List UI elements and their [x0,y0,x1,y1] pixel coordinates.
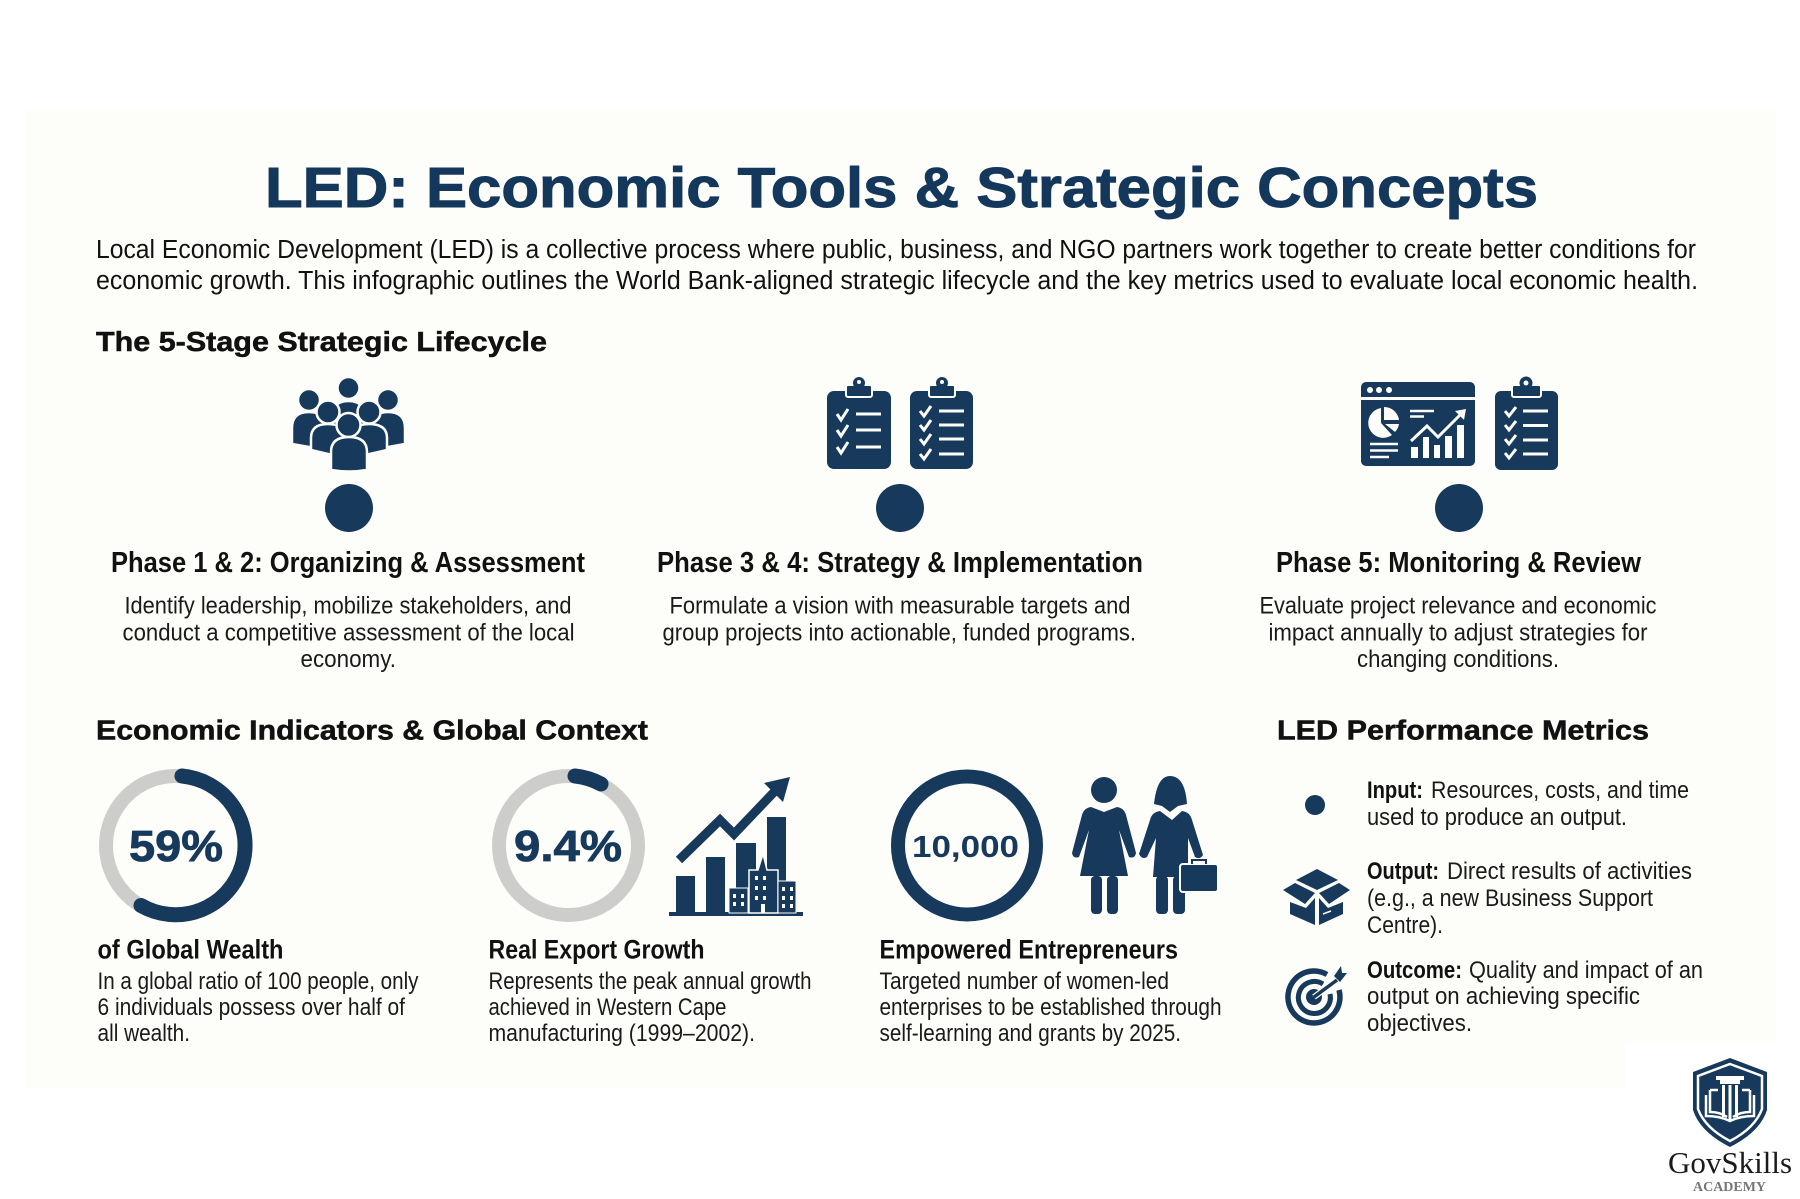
text: export growth: achieved in Western Cape [488,994,726,1021]
metric: output [1367,858,1692,939]
panel: export growth stat [488,776,812,1047]
phase 5 text [1260,592,1656,673]
ring: 59 percent: 59% [129,822,223,871]
heading: performance metrics: LED Performance Metrics [1277,714,1649,746]
text: export growth [488,968,812,1047]
phase 3 and 4 heading: Phase 3 & 4: Strategy & Implementation [657,547,1143,579]
phase 5 text: impact annually to adjust strategies for [1268,620,1648,646]
intro text: Local Economic Development (LED) is a collective process where public, business, and NGO partners work together to create better conditions for [96,236,1696,264]
metric: outcome: objectives. [1367,1010,1472,1037]
phase 3 and 4 text: Formulate a vision with measurable targets and [670,592,1130,620]
phase 1 and 2 text [122,592,574,673]
label: of global wealth: of Global Wealth [98,934,284,964]
text: export growth: Represents the peak annual growth [488,968,812,995]
metric: input: Input: [1367,777,1423,804]
metric: output: Output: [1367,858,1439,885]
heading: lifecycle: The 5-Stage Strategic Lifecycle [96,326,547,357]
text: export growth: manufacturing (1999–2002). [488,1020,755,1047]
metric: input: used to produce an output. [1367,804,1627,831]
wordmark: GovSkills [1668,1145,1792,1180]
text: entrepreneurs: Targeted number of women-led [880,968,1169,995]
panel: phase 1 and 2 [111,377,585,673]
phase 1 and 2 text: Identify leadership, mobilize stakeholders, and [124,592,572,620]
icon: growth chart with city [669,777,803,916]
icon: two businesswomen [1072,776,1218,914]
phase 1 and 2 text: economy. [300,646,396,673]
metric: input: Resources, costs, and time [1431,777,1689,804]
icon: open box [1283,869,1350,925]
metric: outcome [1367,957,1703,1037]
icon: group of people [292,377,405,472]
phase 3 and 4 text: group projects into actionable, funded programs. [662,620,1136,646]
icon: shield with column and book [1693,1058,1767,1147]
icon: clipboard [1495,376,1558,470]
metric: output: (e.g., a new Business Support [1367,885,1653,912]
icon: two clipboards [827,377,973,469]
logo: GovSkills Academy [1668,1058,1792,1195]
panel: phase 3 and 4 [657,377,1143,646]
text: entrepreneurs: enterprises to be established through [880,994,1222,1021]
text: global wealth: 6 individuals possess over half of [98,994,405,1021]
label: empowered entrepreneurs: Empowered Entrepreneurs [880,934,1178,964]
phase 5 text: Evaluate project relevance and economic [1260,592,1656,620]
phase 5 text: changing conditions. [1357,646,1559,673]
wordmark subtitle: ACADEMY [1693,1180,1766,1195]
intro text [96,236,1698,295]
phase 3 and 4 text [662,592,1136,646]
text: entrepreneurs: self-learning and grants by 2025. [880,1020,1181,1047]
panel: performance metrics [1283,777,1703,1037]
phase 3 and 4 marker [876,484,924,532]
title: LED: Economic Tools & Strategic Concepts [265,156,1538,220]
panel: entrepreneurs stat [880,776,1222,1047]
background panel [25,110,1776,1088]
metric: outcome: Outcome: [1367,957,1462,984]
text: entrepreneurs [880,968,1222,1047]
phase 1 and 2 heading: Phase 1 & 2: Organizing & Assessment [111,547,585,579]
panel: global wealth stat [98,776,418,1047]
text: global wealth: In a global ratio of 100 people, only [98,968,418,995]
icon: input dot [1305,795,1325,815]
ring: 10,000 [898,776,1036,914]
ring: 59 percent [106,776,245,915]
heading: economic indicators: Economic Indicators & Global Context [96,714,648,746]
metric: output: Centre). [1367,912,1443,939]
icon: dashboard [1361,382,1475,466]
phase 1 and 2 text: conduct a competitive assessment of the local [122,620,574,646]
phase 1 and 2 marker [325,484,373,532]
phase 5 marker [1435,484,1483,532]
ring: 9.4 percent [499,776,638,915]
text: global wealth [98,968,418,1047]
icon: target with arrow [1288,966,1347,1023]
text: global wealth: all wealth. [98,1020,190,1047]
metric: outcome: output on achieving specific [1367,983,1640,1010]
metric: input [1367,777,1689,831]
metric: outcome: Quality and impact of an [1469,957,1703,984]
label: real export growth: Real Export Growth [488,934,704,964]
intro text: economic growth. This infographic outlines the World Bank-aligned strategic lifecycle and the key metrics used to evaluate local economic health. [96,267,1698,295]
metric: output: Direct results of activities [1447,858,1692,885]
ring: 10,000: 10,000 [912,829,1019,864]
phase 5 heading: Phase 5: Monitoring & Review [1276,547,1641,579]
panel: phase 5 [1260,376,1656,673]
ring: 9.4 percent: 9.4% [514,822,622,871]
